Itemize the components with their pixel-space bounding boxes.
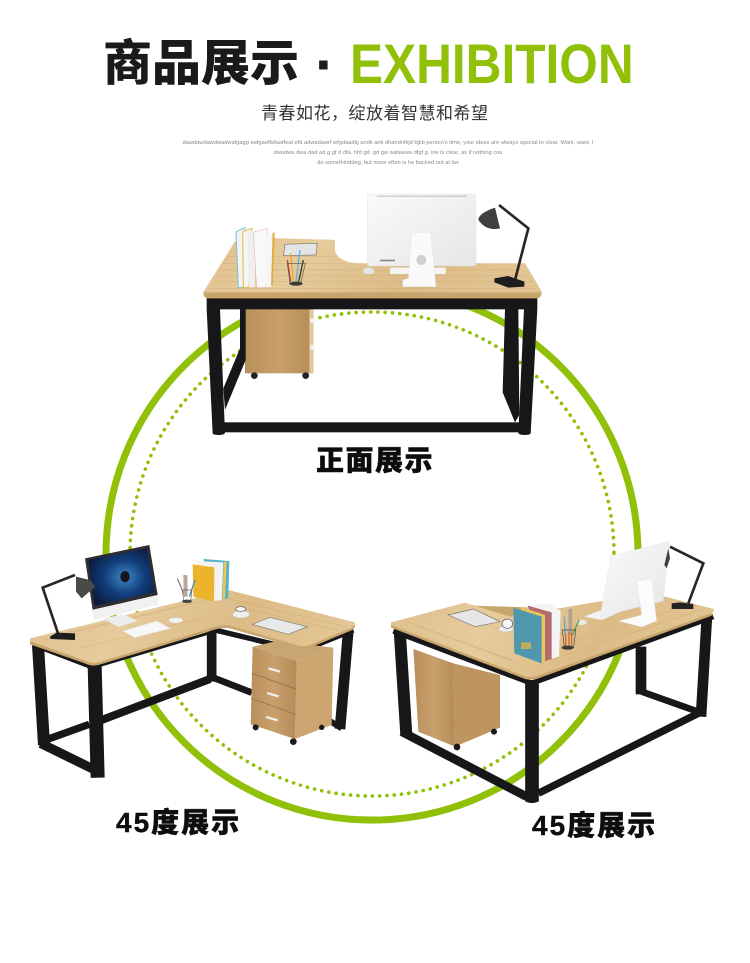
- magazine: [252, 617, 307, 634]
- cabinet: [251, 641, 333, 745]
- small paragraph: dwadwa dwa dad ad g gf d dfa. hfd gd. gd gw aafawwa dfgf g. ine is clear, as if nothing cou: [274, 150, 502, 156]
- label: left 45 degree: 45度展示: [116, 807, 241, 838]
- table top: [203, 238, 542, 298]
- table top: [391, 595, 714, 680]
- desk: right 45 degree view: [391, 542, 714, 803]
- books: [193, 559, 229, 602]
- title: Chinese: 商品展示: [103, 37, 299, 91]
- title: EXHIBITION: EXHIBITION: [350, 32, 634, 95]
- ring: dotted green circle: [130, 312, 614, 796]
- cabinet: [413, 649, 500, 750]
- lamp: [478, 205, 528, 288]
- magazine: [448, 609, 500, 627]
- monitor: [85, 545, 158, 627]
- small paragraph: do somethinddeg, but more often is he backed out at las: [317, 160, 459, 166]
- subtitle: 青春如花，绽放着智慧和希望: [261, 104, 488, 123]
- metal frame: [400, 615, 707, 797]
- pen cup: [562, 609, 579, 650]
- books: [513, 603, 561, 663]
- lamp: [664, 547, 703, 609]
- desk: left 45 degree view: [30, 545, 355, 778]
- table top: [30, 590, 355, 666]
- monitor back: [363, 194, 476, 287]
- metal frame: [33, 630, 353, 778]
- pen cup: [287, 250, 305, 286]
- ring: solid green circle: [106, 288, 638, 820]
- label: right 45 degree: 45度展示: [532, 810, 657, 841]
- keyboard and mouse: [123, 618, 183, 638]
- monitor back: [576, 542, 669, 627]
- desk: front view: [203, 194, 542, 435]
- books: [236, 228, 275, 288]
- metal frame: [207, 297, 537, 435]
- label: front view: 正面展示: [316, 445, 434, 476]
- coffee cup: [232, 607, 250, 618]
- lamp: [43, 575, 95, 640]
- cabinet: [245, 309, 315, 379]
- front leg and rails: [393, 617, 713, 803]
- pen cup: [177, 575, 195, 603]
- magazine: [283, 243, 317, 256]
- title: separator dot: ·: [315, 31, 335, 98]
- small paragraph: dawdawdawdwadwafgagg eafgaeffafaaffeat efd adwadawrf wfgdaadkj andk ank dhahdnfkjd bjkb person's time, your ideas are always special to clear. Want, want, I: [182, 140, 594, 146]
- coffee cup: [499, 619, 513, 632]
- small paragraph: [182, 140, 594, 166]
